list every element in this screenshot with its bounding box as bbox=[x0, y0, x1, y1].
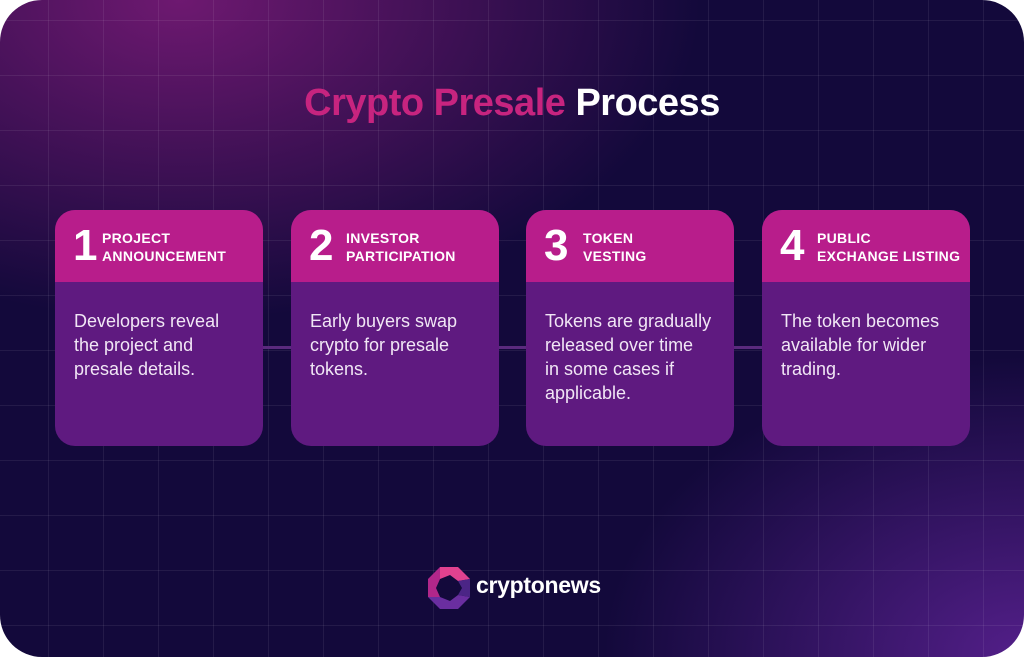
header: step 3: VESTING bbox=[583, 248, 647, 264]
text: step 4: available for wider bbox=[781, 335, 926, 355]
text: step 4: trading. bbox=[781, 359, 841, 379]
text: step 1 bbox=[74, 311, 219, 379]
text: step 1: Developers reveal bbox=[74, 311, 219, 331]
text: step 3 bbox=[545, 311, 712, 403]
header: step 4: 4 bbox=[780, 221, 804, 270]
text: step 2 bbox=[310, 311, 457, 379]
text: step 4: The token becomes bbox=[781, 311, 939, 331]
text: step 2: crypto for presale bbox=[310, 335, 449, 355]
header: step 1 bbox=[55, 210, 263, 282]
icon: logo mark bbox=[428, 567, 470, 609]
header: step 4 bbox=[762, 210, 970, 282]
header: step 2 bbox=[291, 210, 499, 282]
header: step 3: TOKEN bbox=[583, 230, 633, 246]
title: Crypto Presale Process bbox=[304, 82, 720, 124]
logo: cryptonews: cryptonews bbox=[476, 572, 601, 598]
panel: step 3 bbox=[526, 210, 734, 446]
text: step 2: tokens. bbox=[310, 359, 368, 379]
panel: step 4 bbox=[762, 210, 970, 446]
text: step 3: Tokens are gradually bbox=[545, 311, 711, 331]
text: step 3: applicable. bbox=[545, 383, 631, 403]
panel: step 1 bbox=[55, 210, 263, 446]
text: step 3: in some cases if bbox=[545, 359, 674, 379]
header: step 4: PUBLIC bbox=[817, 230, 871, 246]
header: step 2: INVESTOR bbox=[346, 230, 420, 246]
connector line bbox=[263, 346, 763, 349]
header: step 1: 1 bbox=[73, 221, 97, 270]
text: step 2: Early buyers swap bbox=[310, 311, 457, 331]
header: step 3 bbox=[526, 210, 734, 282]
header: step 3: 3 bbox=[544, 221, 568, 270]
text: step 1: the project and bbox=[74, 335, 193, 355]
header: step 2: PARTICIPATION bbox=[346, 248, 456, 264]
logo: cryptonews bbox=[428, 567, 601, 609]
header: step 1: ANNOUNCEMENT bbox=[102, 248, 226, 264]
header: step 1: PROJECT bbox=[102, 230, 170, 246]
text: step 1: presale details. bbox=[74, 359, 195, 379]
panel: step 2 bbox=[291, 210, 499, 446]
header: step 4: EXCHANGE LISTING bbox=[817, 248, 960, 264]
text: step 3: released over time bbox=[545, 335, 693, 355]
text: step 4 bbox=[781, 311, 939, 379]
header: step 2: 2 bbox=[309, 221, 333, 270]
